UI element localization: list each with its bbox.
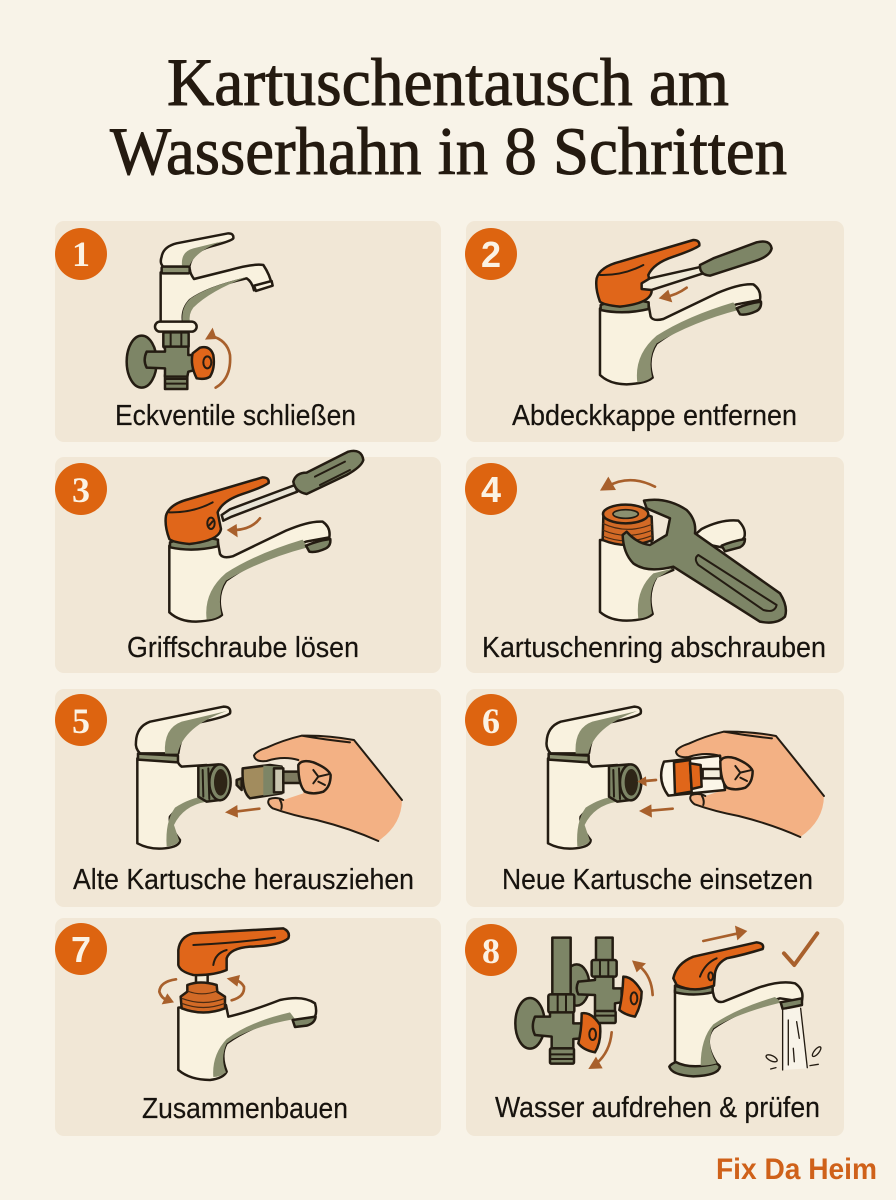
- step badge 4: 4: [481, 469, 501, 510]
- step badge 3: 3: [72, 470, 90, 510]
- panel: step 8: [465, 918, 844, 1136]
- panel: step 6: [465, 689, 844, 907]
- illustration: reassembling handle onto faucet: [159, 928, 316, 1080]
- step badge 6: 6: [482, 701, 500, 741]
- title: Kartuschentausch am: [167, 44, 729, 120]
- step label: Neue Kartusche einsetzen: [502, 864, 813, 896]
- illustration: wrench unscrewing cartridge ring: [600, 477, 786, 623]
- step label: Kartuschenring abschrauben: [482, 632, 826, 664]
- card background: [466, 689, 844, 907]
- panel: step 7: [55, 918, 441, 1136]
- step badge 5: [55, 694, 107, 746]
- step badge 1: [55, 228, 107, 280]
- step badge 1: 1: [72, 234, 90, 274]
- illustration: faucet and screwdriver removing cap: [596, 240, 772, 384]
- panel: step 5: [55, 689, 441, 907]
- illustration: inserting the new cartridge by hand: [546, 707, 824, 849]
- step label: Alte Kartusche herausziehen: [73, 864, 414, 896]
- illustration: faucet with closing angle valve: [127, 233, 273, 389]
- step badge 8: 8: [482, 931, 500, 971]
- step label: Abdeckkappe entfernen: [512, 400, 797, 432]
- step badge 2: [465, 228, 517, 280]
- step badge 2: 2: [481, 234, 501, 275]
- step badge 7: [55, 923, 107, 975]
- card background: [55, 689, 441, 907]
- card background: [55, 457, 441, 673]
- illustration: faucet running water with checkmark: [669, 926, 822, 1076]
- title: Wasserhahn in 8 Schritten: [110, 113, 787, 189]
- step badge 7: 7: [71, 929, 91, 970]
- brand wordmark: Fix Da Heim: [716, 1153, 877, 1186]
- illustration: reopened angle valves: [515, 938, 653, 1069]
- step label: Zusammenbauen: [142, 1093, 348, 1125]
- title: [110, 44, 787, 189]
- card background: [466, 457, 844, 673]
- step badge 6: [465, 694, 517, 746]
- illustration: pulling out the old cartridge by hand: [136, 707, 402, 849]
- step badge 4: [465, 463, 517, 515]
- step label: Wasser aufdrehen & prüfen: [495, 1092, 820, 1124]
- panel: step 4: [465, 457, 844, 673]
- step badge 8: [465, 924, 517, 976]
- panel: step 2: [465, 221, 844, 442]
- card background: [466, 918, 844, 1136]
- panel: step 3: [55, 451, 441, 673]
- card background: [55, 918, 441, 1136]
- step badge 3: [55, 463, 107, 515]
- step badge 5: 5: [72, 701, 90, 741]
- step label: Eckventile schließen: [115, 400, 356, 432]
- card background: [55, 221, 441, 442]
- step label: Griffschraube lösen: [127, 632, 359, 664]
- panel: step 1: [55, 221, 441, 442]
- illustration: faucet with screwdriver at handle screw: [166, 451, 363, 622]
- card background: [466, 221, 844, 442]
